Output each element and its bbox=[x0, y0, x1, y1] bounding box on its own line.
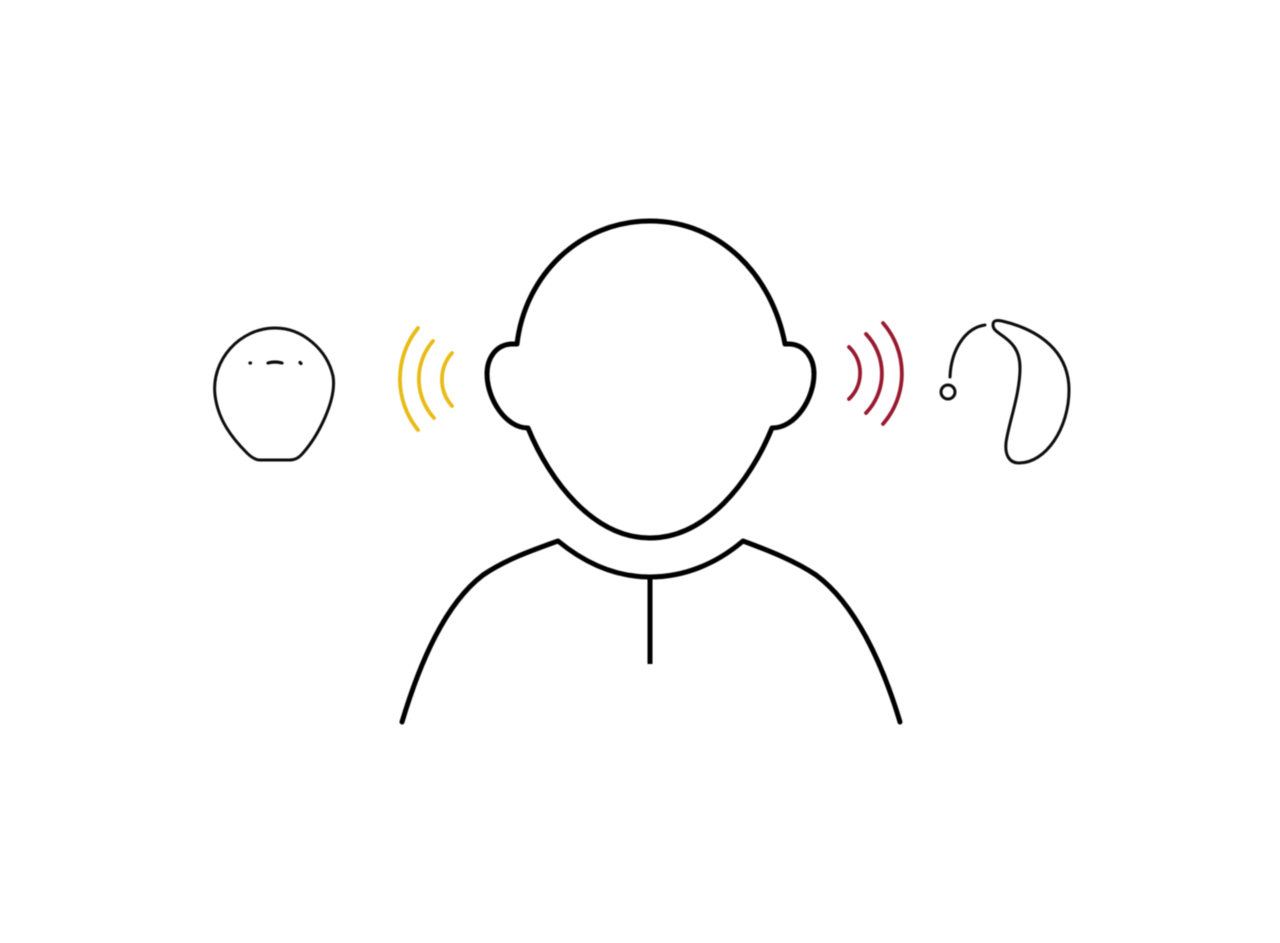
shoulders and collar bbox=[402, 541, 900, 722]
inner wave bbox=[849, 347, 860, 399]
sound waves: red bbox=[849, 323, 902, 424]
middle wave bbox=[866, 334, 882, 413]
icon: behind-the-ear hearing aid bbox=[941, 320, 1069, 463]
ear tip bbox=[941, 385, 955, 399]
head outline with ears bbox=[487, 221, 814, 538]
outer wave bbox=[883, 323, 902, 424]
device detail marks bbox=[250, 362, 301, 364]
shirt centre line bbox=[648, 577, 652, 664]
outer wave bbox=[400, 328, 418, 430]
person figure bbox=[402, 221, 900, 722]
inner wave bbox=[442, 353, 452, 406]
sound waves: yellow bbox=[400, 328, 452, 430]
device body bbox=[215, 328, 334, 460]
middle wave bbox=[419, 341, 434, 418]
icon: in-ear hearing device bbox=[215, 328, 334, 460]
hearing aid body bbox=[993, 320, 1069, 463]
connecting tube bbox=[950, 325, 985, 377]
